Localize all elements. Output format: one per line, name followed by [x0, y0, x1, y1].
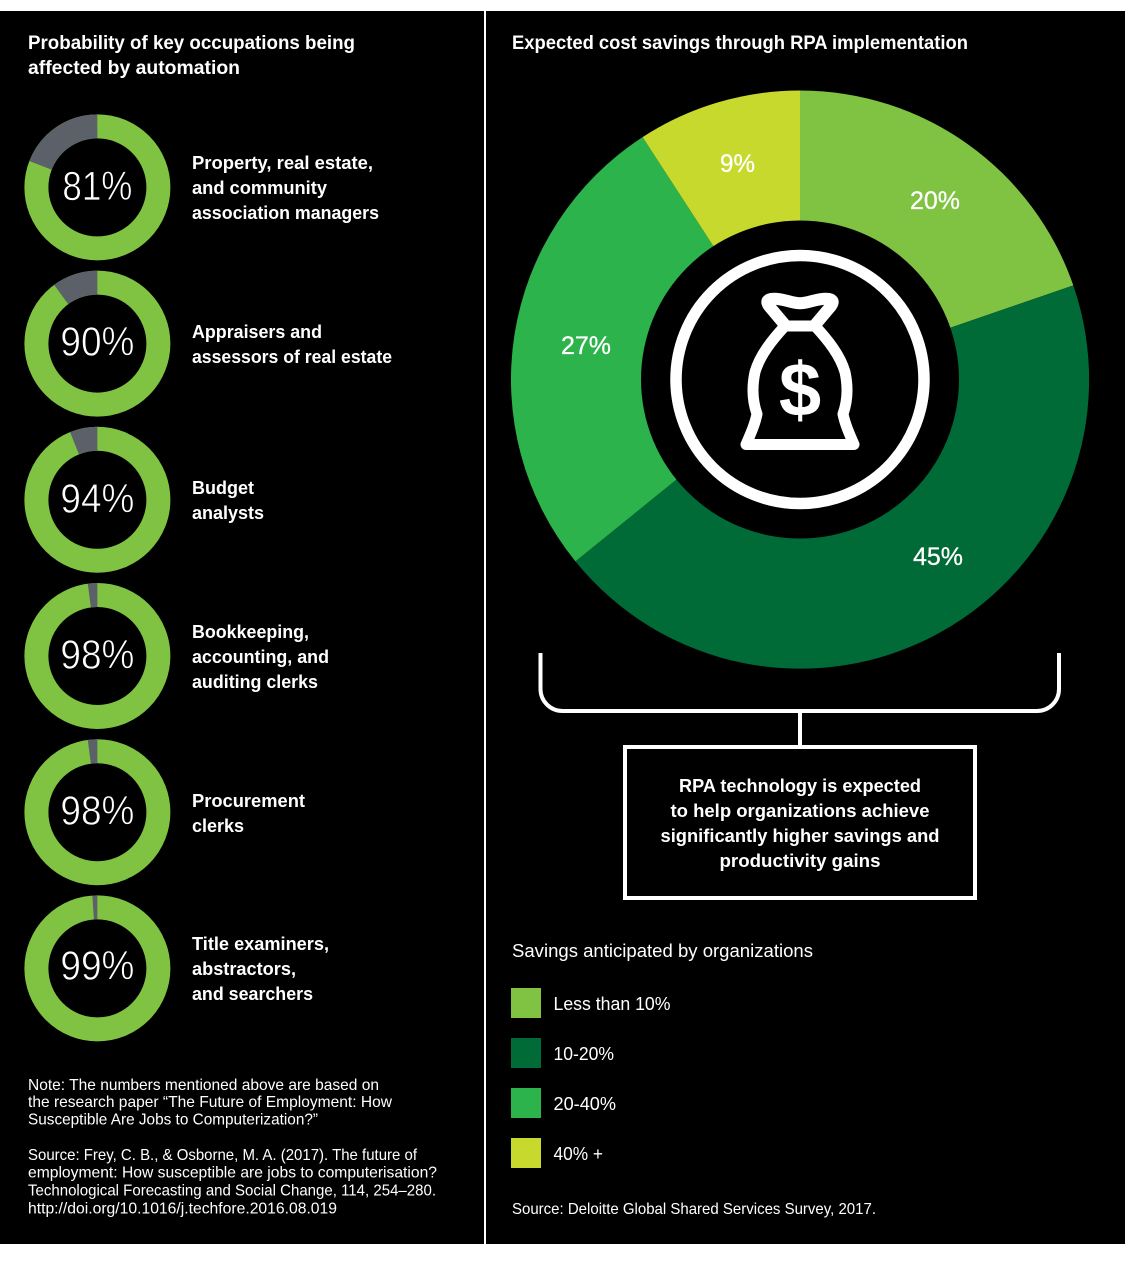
- label: appraisers: [192, 321, 392, 367]
- label: title examiners: abstractors,: [192, 958, 296, 979]
- legend item: 20-40%: 20-40%: [554, 1093, 616, 1114]
- heading: probability: affected by automation: [28, 58, 240, 79]
- panel: expected cost savings: [511, 33, 1089, 1218]
- bracket connector: [540, 653, 1059, 747]
- panel: probability of occupations: [12, 33, 437, 1218]
- label: title examiners: [192, 933, 329, 1004]
- source text: Frey and Osborne: Source: Frey, C. B., & Osborne, M. A. (2017). The future of: [28, 1147, 418, 1164]
- donut: 98% procurement: [29, 744, 166, 880]
- donut: 98% bookkeeping: 98%: [60, 632, 134, 678]
- legend item: less than 10%: [511, 988, 670, 1018]
- legend item: 20-40%: [511, 1088, 616, 1118]
- label: property managers: and community: [192, 177, 328, 198]
- note text: Susceptible Are Jobs to Computerization?”: [28, 1112, 318, 1128]
- callout box: [625, 747, 975, 898]
- source text: Frey and Osborne: [28, 1147, 437, 1218]
- label: property managers: Property, real estate,: [192, 152, 373, 173]
- note text: [28, 1077, 392, 1128]
- legend: [511, 940, 813, 1168]
- note text: the research paper “The Future of Employment: How: [28, 1094, 392, 1111]
- heading: probability: Probability of key occupations being: [28, 33, 355, 54]
- donut: 98% bookkeeping: [29, 588, 166, 724]
- label: budget analysts: analysts: [192, 502, 264, 523]
- donut: 98% procurement: 98%: [60, 788, 134, 834]
- legend item: 40% +: 40% +: [554, 1143, 603, 1164]
- label: procurement clerks: Procurement: [192, 790, 305, 811]
- label: appraisers: Appraisers and: [192, 321, 322, 342]
- callout box: RPA technology is expected: [679, 775, 921, 796]
- icon: money bag: $: [779, 348, 821, 433]
- icon: money bag: [676, 256, 924, 504]
- donut: 81%: 81%: [62, 163, 132, 209]
- donut chart: savings distribution: 45%: [913, 543, 963, 571]
- note text: Note: The numbers mentioned above are based on: [28, 1077, 379, 1094]
- label: bookkeeping: auditing clerks: [192, 671, 318, 692]
- source text: Frey and Osborne: http://doi.org/10.1016/j.techfore.2016.08.019: [28, 1200, 337, 1218]
- label: budget analysts: Budget: [192, 477, 254, 498]
- donut: 94%: [18, 421, 177, 579]
- legend item: 10-20%: [511, 1038, 614, 1068]
- donut chart: savings distribution: 20%: [910, 187, 960, 215]
- legend item: 10-20%: 10-20%: [554, 1043, 614, 1064]
- source text: Deloitte survey: Source: Deloitte Global Shared Services Survey, 2017.: [512, 1201, 876, 1218]
- label: procurement clerks: [192, 790, 305, 836]
- donut chart: savings distribution: [511, 90, 1089, 669]
- label: property managers: association managers: [192, 202, 379, 223]
- label: title examiners: and searchers: [192, 983, 313, 1004]
- label: bookkeeping: Bookkeeping,: [192, 621, 309, 642]
- label: bookkeeping: [192, 621, 329, 692]
- callout box: productivity gains: [720, 850, 880, 871]
- callout box: significantly higher savings and: [660, 825, 940, 846]
- donut chart: savings distribution: 27%: [561, 332, 611, 360]
- label: appraisers: assessors of real estate: [192, 346, 392, 367]
- source text: Frey and Osborne: Technological Forecasting and Social Change, 114, 254–280.: [28, 1182, 436, 1200]
- label: bookkeeping: accounting, and: [192, 646, 329, 667]
- label: procurement clerks: clerks: [192, 815, 244, 836]
- donut: 81%: [18, 108, 177, 267]
- label: property managers: [192, 152, 379, 223]
- heading: probability: [28, 33, 355, 79]
- source text: Frey and Osborne: employment: How susceptible are jobs to computerisation?: [28, 1164, 437, 1182]
- donut chart: savings distribution: 9%: [720, 150, 755, 178]
- donut: 90%: [12, 258, 183, 429]
- donut: 90%: 90%: [60, 318, 134, 364]
- label: budget analysts: [192, 477, 264, 523]
- donut: 99%: [33, 904, 162, 1033]
- legend heading: Savings anticipated by organizations: [512, 940, 813, 961]
- legend item: less than 10%: Less than 10%: [554, 993, 670, 1014]
- label: title examiners: Title examiners,: [192, 933, 329, 954]
- legend item: 40% +: [511, 1138, 603, 1168]
- callout box: to help organizations achieve: [670, 800, 930, 821]
- donut: 99%: 99%: [60, 942, 134, 988]
- donut: 94%: 94%: [60, 476, 134, 522]
- heading: cost savings: Expected cost savings through RPA implementation: [512, 33, 968, 54]
